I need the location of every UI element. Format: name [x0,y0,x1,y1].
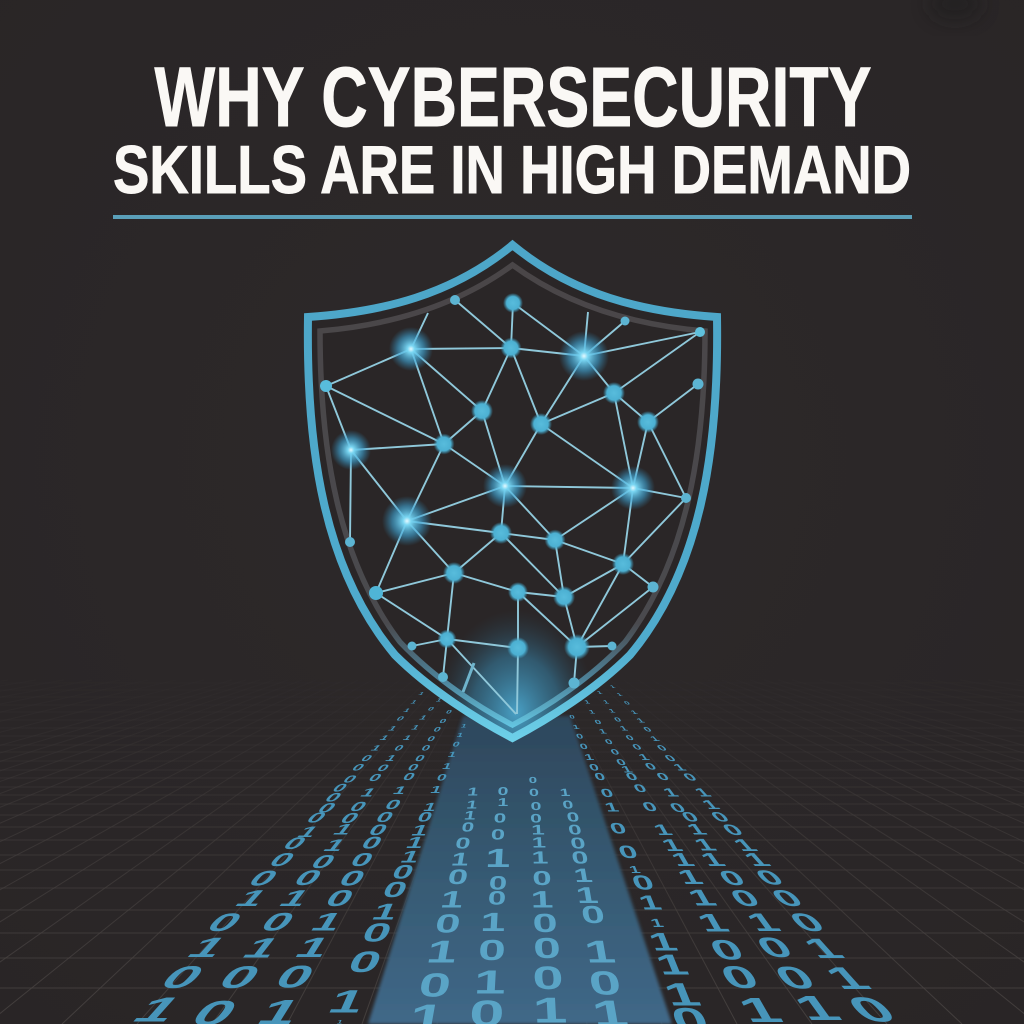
right binary column 3: 0 [724,885,766,911]
beam binary column 4: 1 [574,882,600,908]
right binary column 1: 0 [607,819,629,837]
left binary column 1: 0 [394,716,406,722]
beam binary column 1: 1 [424,935,460,969]
left binary column 3: 1 [289,932,337,964]
left binary column 2: 1 [409,725,421,731]
left binary column 3: 0 [334,867,370,891]
left binary column 2: 0 [374,763,392,773]
right binary column 4 [609,685,908,1024]
shield inner outline [320,265,705,725]
left binary column 3: 1 [390,784,410,796]
right binary column 1: 0 [628,872,658,894]
left binary column 1: 1 [368,744,384,752]
beam binary column 3: 0 [530,811,542,825]
left binary column 1: 1 [228,885,276,911]
left binary column 4 [323,723,469,1024]
title underline [113,215,912,219]
beam binary column 2: 0 [487,887,507,909]
left binary column 2: 1 [328,822,358,838]
right binary column 4: 0 [642,727,655,733]
left binary column 1: 0 [301,810,331,826]
right binary column 2: 0 [714,961,766,995]
left binary column 1: 0 [358,753,376,763]
beam binary column 4: 0 [561,799,575,811]
left binary column 2: 0 [392,744,407,752]
left binary column 2: 1 [357,786,380,800]
left binary column 2 [181,697,444,1024]
right binary column 4: 1 [635,718,648,724]
left binary column 4: 1 [397,848,423,866]
left binary column 4: 1 [428,784,444,796]
right binary column 4: 1 [670,763,690,773]
beam binary column 1: 1 [449,850,471,870]
shield base glow [446,619,586,734]
left binary column 1: 1 [386,726,399,732]
beam binary column 1: 0 [433,908,463,938]
beam binary column 4: 1 [572,864,594,886]
right binary column 1: 1 [644,928,682,956]
right binary column 1: 1 [651,949,693,981]
right binary column 1: 0 [568,714,576,720]
beam binary column 3: 1 [530,887,554,913]
left binary column 4: 0 [435,772,449,782]
right binary column 3: 0 [677,809,703,825]
beam binary column 2: 0 [488,872,508,894]
right binary column 4: 1 [616,693,624,697]
beam binary column 1: 0 [454,834,472,852]
left binary column 4: 0 [357,918,397,948]
right binary column 3: 1 [689,836,721,854]
beam binary column 2: 1 [480,907,506,937]
right binary column 2: 1 [619,765,635,775]
right binary column 1: 1 [627,864,643,876]
beam binary column 1 [406,786,480,1024]
right binary column 1: 0 [593,771,607,783]
left binary column 2: 1 [383,753,399,763]
right binary column 4: 1 [691,786,715,800]
right binary column 3: 0 [766,960,824,996]
beam binary column 3: 0 [529,787,539,799]
left binary column 1: 0 [263,850,301,870]
beam binary column 2 [468,786,511,1024]
left binary column 2: 1 [273,885,317,911]
shield body fill [308,245,717,738]
right binary column 4: 1 [738,850,776,870]
left binary column 3: 0 [431,726,443,734]
right binary column 4: 0 [749,867,791,889]
left binary column 1: 1 [417,692,425,696]
left binary column 1: 1 [292,823,324,841]
right binary column 1: 1 [583,752,595,762]
beam binary column 3: 0 [532,932,562,964]
right binary column 4: 0 [706,809,734,825]
beam binary column 2: 1 [497,797,509,809]
right binary column 2: 1 [583,699,591,705]
left binary column 4: 1 [440,761,454,771]
left binary column 3 [249,709,454,1024]
central light beam [368,716,672,1024]
right binary column 2: 1 [598,728,609,736]
beam binary column 4 [559,787,631,1024]
right binary column 4: 0 [661,753,679,763]
right binary column 1: 0 [598,786,616,800]
right binary column 2 [583,699,790,1024]
right binary column 2: 0 [593,719,603,725]
right binary column 1: 0 [615,842,641,862]
left binary column 4: 1 [446,751,458,759]
right binary column 3: 1 [683,822,711,838]
left binary column 2: 0 [210,959,270,995]
right binary column 2: 0 [623,772,641,782]
right binary column 3: 1 [596,691,604,695]
left binary column 4: 0 [378,878,412,902]
left binary column 2: 1 [235,932,289,964]
left binary column 1: 1 [179,931,237,963]
left binary column 3: 0 [346,849,378,871]
beam binary column 1: 0 [460,820,476,834]
right binary column 2: 0 [603,738,615,746]
beam binary column 4: 0 [569,834,587,852]
right binary column 1 [568,714,715,1024]
right binary column 3: 1 [607,708,617,714]
beam binary column 1: 1 [466,786,480,798]
left binary column 2: 1 [401,734,413,742]
perspective floor grid [0,680,1024,1024]
left binary column 4: 0 [343,945,387,979]
beam binary column 4: 0 [586,964,624,1002]
left binary column 2: 0 [365,772,385,784]
left binary column 3: 0 [400,771,418,783]
beam binary column 3: 1 [531,848,549,868]
left binary column 1: 1 [409,699,420,705]
right binary column 3: 1 [601,699,611,705]
beam binary column 2: 0 [497,786,509,798]
beam binary column 4: 0 [567,822,583,838]
right binary column 1: 0 [579,743,589,751]
network links [326,300,700,714]
right binary column 2: 0 [703,934,751,966]
right binary column 4: 1 [648,735,662,743]
left binary column 3: 0 [357,833,387,853]
left binary column 2: 1 [434,697,444,703]
left binary column 4: 1 [368,899,402,925]
left binary column 1: 0 [199,908,251,936]
right binary column 3: 0 [624,734,636,742]
beam binary column 1: 1 [465,799,479,811]
beam binary column 4: 1 [582,935,618,969]
left binary column 2: 0 [346,800,370,814]
left binary column 1: 0 [313,800,341,816]
beam binary column 3: 0 [532,908,558,938]
right binary column 2: 1 [667,850,699,870]
left binary column 2: 0 [305,852,341,872]
right binary column 2: 0 [608,748,622,756]
left binary column 3: 0 [444,709,454,715]
right binary column 2: 1 [692,909,734,937]
left binary column 1: 0 [278,834,312,852]
left binary column 3: 0 [365,821,391,839]
left binary column 2: 1 [319,835,351,855]
left binary column 3: 0 [413,753,427,763]
left binary column 1: 0 [348,763,368,773]
left binary column 4: 0 [388,861,418,883]
left binary column 1: 0 [339,773,361,785]
binary streams [122,685,908,1024]
beam binary column 2: 0 [490,827,506,843]
right binary column 3: 0 [630,743,644,751]
left binary column 1: 0 [320,791,346,805]
right binary column 3: 0 [612,717,624,723]
left binary column 3: 0 [268,959,322,995]
right binary column 4: 0 [717,821,749,839]
right binary column 4: 1 [728,836,762,854]
beam binary column 3: 1 [531,822,545,838]
beam binary column 2: 0 [493,810,507,826]
right binary column 4: 0 [679,771,701,783]
right binary column 4: 0 [781,908,833,936]
title [113,50,911,208]
right binary column 2: 0 [614,757,628,767]
beam binary column 2: 1 [485,843,511,873]
beam binary column 3 [529,775,568,1024]
right binary column 3: 0 [749,933,801,963]
right binary column 3: 1 [660,786,682,800]
left binary column 3: 0 [372,809,398,825]
beam binary column 4: 0 [565,810,581,824]
right binary column 3 [596,691,849,1024]
right binary column 2: 1 [673,865,707,889]
left binary column 2: 0 [253,908,303,936]
right binary column 4: 1 [815,960,879,996]
right binary column 2: 1 [658,835,687,855]
right binary column 1: 1 [572,724,580,730]
right binary column 2: 0 [631,782,649,794]
left binary column 3: 0 [382,798,404,812]
right binary column 3: 1 [696,850,730,870]
beam binary column 1: 1 [438,887,466,913]
right binary column 1: 0 [575,733,585,741]
right binary column 2: 0 [639,800,661,814]
beam binary column 3: 0 [530,801,542,813]
right binary column 1: 0 [587,762,601,772]
left binary column 4: 1 [408,821,432,839]
left binary column 3: 0 [425,735,437,743]
beam binary column 2: 1 [473,963,507,1001]
beam binary column 2: 0 [477,934,507,966]
beam binary column 1: 1 [463,808,477,822]
left binary column 3: 0 [419,744,433,752]
beam binary column 1: 0 [446,865,470,889]
right binary column 2: 1 [650,821,676,839]
right binary column 4: 1 [629,709,640,715]
left binary column 4: 0 [451,741,461,749]
network nodes [320,293,705,688]
beam binary column 1: 0 [416,966,454,1004]
left binary column 1: 0 [241,867,285,891]
left binary column 2: 0 [336,810,364,826]
beam binary column 3: 0 [532,867,552,889]
beam binary column 4: 0 [579,901,607,929]
right binary column 4: 1 [698,798,724,812]
right binary column 4: 0 [654,744,670,752]
right binary column 3: 1 [739,908,787,936]
right binary column 3: 0 [666,801,690,815]
left binary column 4: 1 [421,800,439,814]
right binary column 1: 1 [648,916,666,930]
right binary column 3: 0 [642,762,660,772]
left binary column 4: 1 [323,984,371,1020]
left binary column 2: 1 [417,715,429,721]
right binary column 3: 1 [636,752,652,762]
left binary column 3: 0 [438,718,448,724]
left binary column 2: 0 [288,866,328,890]
left binary column 3: 1 [305,908,349,936]
right binary column 1: 1 [658,977,706,1013]
right binary column 2: 1 [588,709,597,715]
left binary column 4: 0 [415,809,435,825]
right binary column 4: 0 [763,885,811,911]
beam binary column 3: 0 [532,960,564,996]
right binary column 2: 1 [683,885,721,911]
beam binary column 3: 0 [529,775,538,785]
left binary column 1: 0 [329,782,351,794]
right binary column 4: 1 [794,932,852,964]
small device sketch [463,663,474,692]
right binary column 3: 0 [713,867,751,889]
left binary column 4: 1 [455,732,465,738]
left binary column 2: 0 [426,706,436,712]
right binary column 1: 1 [635,892,665,914]
left binary column 1: 1 [402,707,413,713]
right binary column 4: 1 [609,685,617,689]
beam binary column 3: 1 [531,835,547,851]
left binary column 1 [122,692,425,1024]
left binary column 3: 0 [405,763,421,773]
left binary column 1: 0 [151,959,215,995]
right binary column 3: 1 [618,726,630,732]
shield outer outline [308,245,717,738]
left binary column 4: 1 [403,834,427,852]
left binary column 1: 1 [377,734,391,742]
shield [308,245,717,814]
left binary column 3: 0 [320,885,360,911]
right binary column 1: 1 [603,801,622,815]
right binary column 4: 0 [622,700,632,706]
left binary column 4: 1 [460,723,469,729]
beam binary column 4: 0 [570,848,590,868]
beam binary column 4: 1 [559,787,571,799]
right binary column 3: 0 [654,771,672,783]
